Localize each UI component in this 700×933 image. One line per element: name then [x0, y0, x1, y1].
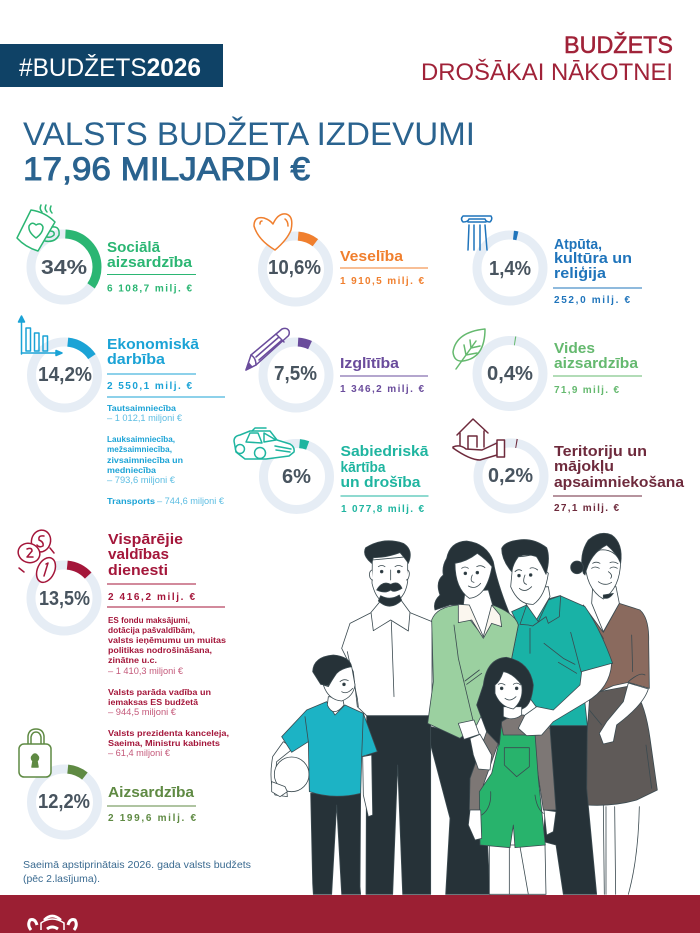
- donut chart: 7,5%: 7,5%: [274, 363, 317, 385]
- breakdown: Valsts prezidenta kanceleja,: [108, 728, 229, 738]
- heading: Atpūta,: [554, 236, 602, 253]
- heading: Aizsardzība: [108, 784, 195, 801]
- breakdown: politikas nodrošināšana,: [108, 645, 212, 655]
- amount: 252,0 milj. €: [554, 295, 630, 306]
- icon: leaf: [453, 329, 485, 369]
- figure: woman's cuff and hand: [458, 720, 492, 770]
- breakdown: Tautsaimniecība: [107, 403, 176, 413]
- heading: Sociālā: [107, 239, 161, 256]
- figure: girl in overalls: [468, 657, 556, 894]
- heading: Ekonomiskā: [107, 336, 200, 353]
- title: VALSTS BUDŽETA IZDEVUMI: [23, 116, 475, 152]
- breakdown: Saeima, Ministru kabinets: [108, 738, 220, 748]
- donut chart: 0,2%: [478, 443, 544, 509]
- panel: Vides aizsardzība: [453, 329, 642, 406]
- figure: man with moustache: [342, 541, 432, 894]
- campaign slogan: BUDŽETS: [564, 32, 673, 59]
- heading: [107, 336, 200, 368]
- figure: teal-shirt man's arm: [518, 663, 612, 736]
- heading: [340, 443, 429, 491]
- donut chart: 7,5%: [263, 342, 329, 408]
- donut chart: 34%: [31, 234, 97, 300]
- icon: column: [462, 216, 492, 250]
- panel: Atpūta, kultūra un reliģija: [462, 216, 642, 306]
- donut chart: 6%: 6%: [282, 466, 311, 488]
- heading: Teritoriju un: [554, 443, 647, 460]
- title: 17,96 MILJARDI €: [23, 151, 310, 187]
- breakdown: – 61,4 miljoni €: [108, 748, 171, 759]
- icon: growth chart: [18, 316, 62, 356]
- panel: Sociālā aizsardzība: [17, 205, 196, 300]
- icon: police car: [234, 428, 294, 459]
- illustration: family: [271, 533, 657, 894]
- icon: pencil: [246, 328, 289, 370]
- breakdown: Transports: [107, 496, 155, 506]
- amount: 1 077,8 milj. €: [341, 504, 424, 515]
- amount: 27,1 milj. €: [554, 503, 619, 514]
- amount: 1 346,2 milj. €: [340, 384, 424, 395]
- panel: Aizsardzība: [19, 729, 196, 835]
- campaign slogan: [421, 32, 673, 86]
- breakdown: Lauksaimniecība,: [107, 434, 175, 444]
- donut chart: 0,4%: [477, 340, 543, 406]
- heading: aizsardzība: [107, 254, 193, 271]
- heading: Izglītība: [340, 355, 400, 372]
- heading: [108, 531, 183, 579]
- amount: 6 108,7 milj. €: [107, 284, 192, 294]
- breakdown: zinātne u.c.: [108, 655, 157, 665]
- icon: coins: [15, 528, 59, 585]
- amount: 2 550,1 milj. €: [107, 381, 192, 392]
- heading: Vides: [554, 340, 595, 357]
- heading: aizsardzība: [554, 355, 639, 372]
- breakdown: – 1 012,1 miljoni €: [107, 413, 183, 424]
- panel: Teritoriju un mājokļu apsaimniekošana: [453, 419, 685, 514]
- heading: Veselība: [340, 248, 404, 265]
- panel: Vispārējie valdības dienesti: [15, 528, 229, 759]
- amount: 71,9 milj. €: [554, 385, 619, 396]
- icon: house in hand: [453, 419, 504, 460]
- source note: (pēc 2.lasījuma).: [23, 873, 100, 885]
- donut chart: 12,2%: [32, 769, 98, 835]
- heading: [554, 340, 639, 372]
- heading: reliģija: [554, 265, 607, 282]
- breakdown: – 793,6 miljoni €: [107, 475, 176, 486]
- donut chart: 10,6%: 10,6%: [268, 257, 321, 279]
- donut chart: 1,4%: [477, 235, 543, 301]
- heading: Vispārējie: [108, 531, 183, 548]
- heading: dienesti: [108, 562, 168, 579]
- breakdown: zivsaimniecība un: [107, 455, 183, 465]
- source note: Saeimā apstiprinātais 2026. gada valsts budžets: [23, 859, 251, 871]
- donut chart: 13,5%: [31, 565, 97, 631]
- breakdown: – 744,6 miljoni €: [157, 496, 225, 507]
- figure: grandmother: [571, 533, 657, 894]
- donut chart: 13,5%: 13,5%: [39, 588, 90, 610]
- breakdown: mežsaimniecība,: [107, 444, 172, 454]
- heading: [554, 443, 685, 491]
- breakdown: – 1 410,3 miljoni €: [108, 666, 184, 677]
- heading: Sabiedriskā: [340, 443, 429, 460]
- donut chart: 12,2%: 12,2%: [38, 791, 90, 813]
- breakdown: Valsts parāda vadība un: [108, 687, 211, 697]
- icon: coat of arms: [29, 916, 76, 930]
- breakdown: [107, 403, 225, 507]
- donut chart: 0,4%: 0,4%: [487, 363, 533, 385]
- breakdown: valsts ieņēmumu un muitas: [108, 635, 226, 645]
- panel: Izglītība: [246, 328, 428, 408]
- donut chart: 34%: 34%: [41, 257, 87, 279]
- heading: [554, 236, 632, 282]
- breakdown: [108, 615, 229, 759]
- breakdown: – 944,5 miljoni €: [108, 707, 177, 718]
- donut chart: 10,6%: [262, 236, 328, 302]
- donut chart: 14,2%: [32, 342, 98, 408]
- breakdown: dotācija pašvaldībām,: [108, 625, 195, 635]
- heading: [107, 239, 193, 271]
- heading: valdības: [108, 546, 169, 563]
- heading: darbība: [107, 351, 166, 368]
- campaign slogan: DROŠĀKAI NĀKOTNEI: [421, 58, 673, 86]
- footer band: [0, 895, 700, 933]
- heading: un drošība: [340, 474, 421, 491]
- hashtag banner: #BUDŽETS2026: [19, 53, 201, 82]
- heading: mājokļu: [554, 458, 614, 475]
- hashtag banner: [0, 44, 223, 87]
- panel: Veselība: [254, 214, 428, 302]
- source note: [23, 859, 251, 885]
- amount: 1 910,5 milj. €: [340, 276, 424, 287]
- amount: 2 199,6 milj. €: [108, 813, 196, 824]
- heading: apsaimniekošana: [554, 474, 685, 491]
- title: [23, 116, 475, 187]
- amount: 2 416,2 milj. €: [108, 592, 195, 603]
- heading: kultūra un: [554, 250, 632, 267]
- icon: padlock: [19, 729, 51, 777]
- breakdown: iemaksas ES budžetā: [108, 697, 198, 707]
- icon: heart: [254, 214, 292, 250]
- donut chart: 0,2%: 0,2%: [488, 465, 533, 487]
- donut chart: 1,4%: 1,4%: [489, 258, 531, 280]
- figure: woman in green sweater: [428, 541, 518, 894]
- breakdown: medniecība: [107, 465, 156, 475]
- panel: Sabiedriskā kārtība un drošība: [234, 428, 429, 515]
- breakdown: ES fondu maksājumi,: [108, 615, 190, 625]
- donut chart: 14,2%: 14,2%: [38, 364, 92, 386]
- donut chart: 6%: [264, 444, 330, 510]
- icon: mug: [17, 205, 59, 251]
- panel: Ekonomiskā darbība: [18, 316, 225, 507]
- figure: man in teal shirt: [502, 540, 613, 894]
- heading: kārtība: [340, 459, 386, 476]
- figure: boy with ball: [271, 655, 377, 894]
